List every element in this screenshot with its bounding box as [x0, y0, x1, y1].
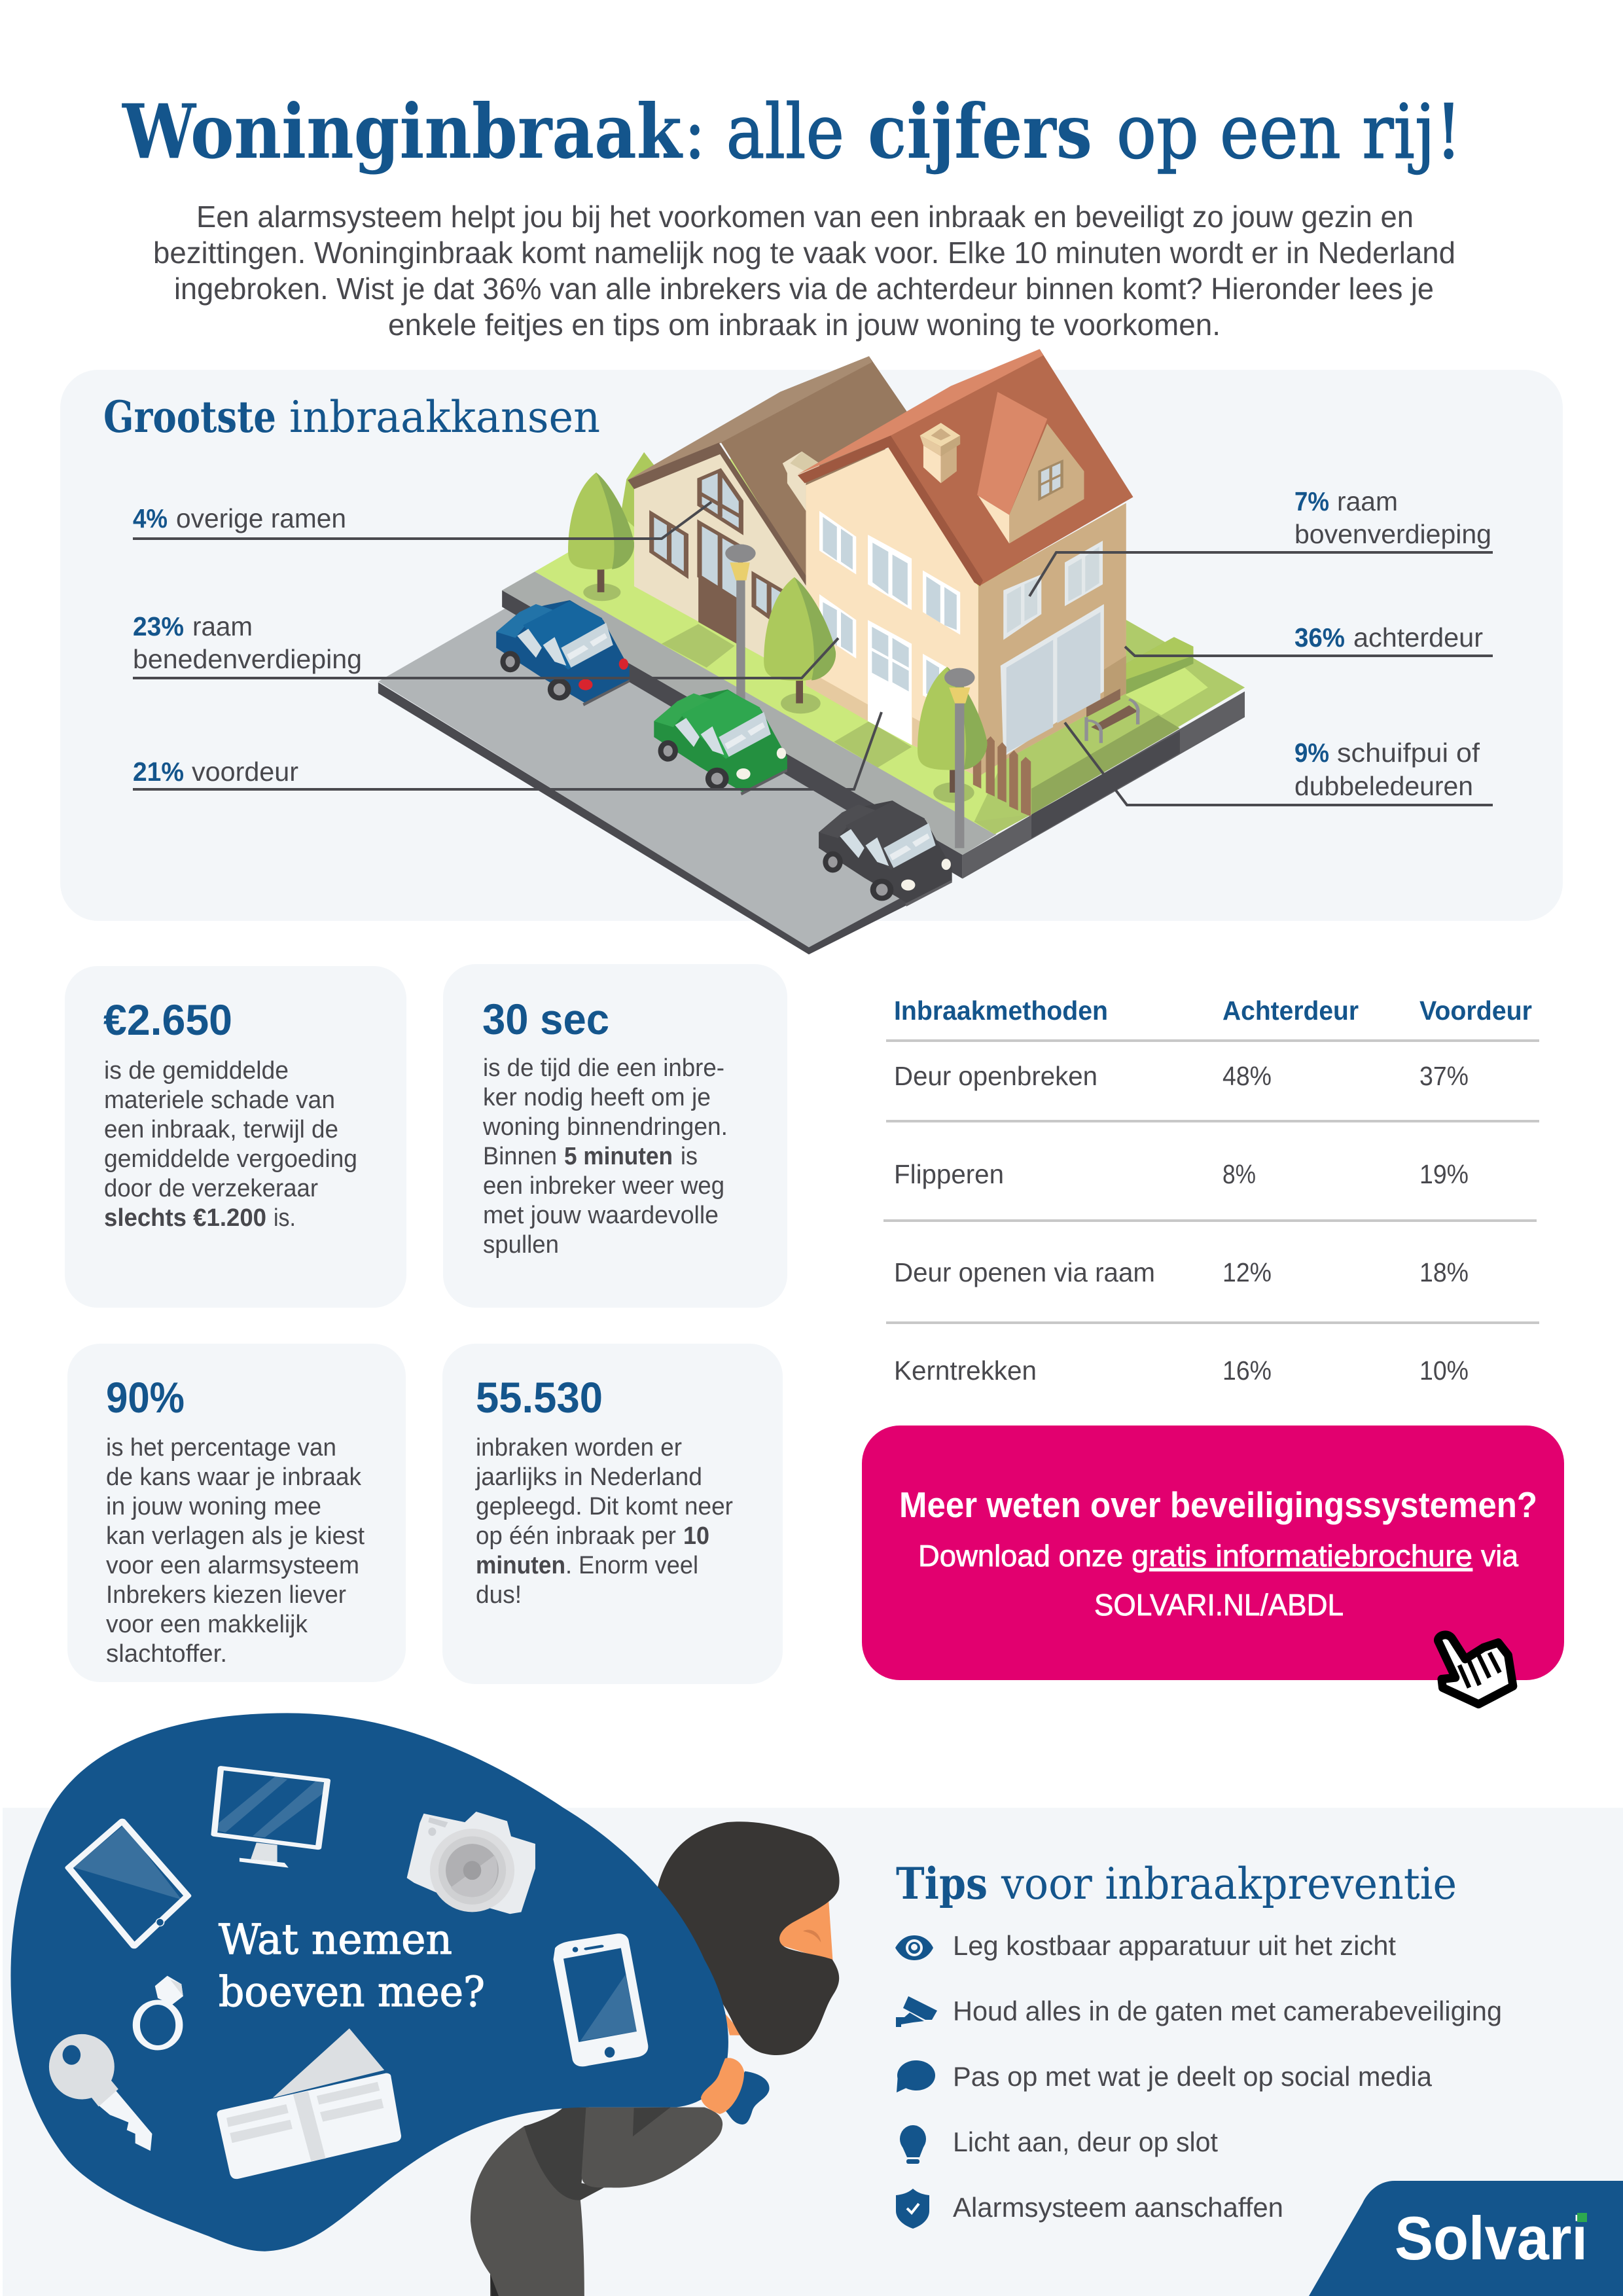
- table: inbraakmethoden: 37%: [1419, 1061, 1469, 1091]
- bench: [1086, 689, 1138, 743]
- callout: 36% achterdeur: [1125, 622, 1493, 656]
- table: inbraakmethoden: Deur openen via raam: [894, 1257, 1155, 1287]
- car: black: [819, 800, 952, 906]
- tip: camera: Houd alles in de gaten met camerabeveiliging: [953, 1996, 1502, 2026]
- tip: licht: [900, 2125, 1218, 2164]
- stat card: schade: is.: [274, 1204, 296, 1232]
- table: inbraakmethoden: 19%: [1419, 1159, 1469, 1189]
- stat card: percentage: Inbrekers kiezen liever: [106, 1581, 346, 1609]
- stat card: tijd: woning binnendringen.: [482, 1113, 728, 1141]
- stat card: schade: door de verzekeraar: [104, 1175, 318, 1202]
- stat card: tijd: met jouw waardevolle: [483, 1202, 719, 1229]
- callout: 9% schuifpui of dubbele deuren: dubbeledeuren: [1294, 771, 1473, 801]
- icon: smartphone: [554, 1933, 648, 2066]
- tip: apparatuur: Leg kostbaar apparatuur uit het zicht: [953, 1930, 1396, 1961]
- callout: download brochure: SOLVARI.NL/ABDL: [1094, 1588, 1344, 1622]
- heading: tips: Tips: [896, 1858, 988, 1909]
- heading: grootste inbraakkansen: Grootste: [103, 391, 276, 442]
- stat card: schade: gemiddelde vergoeding: [104, 1145, 357, 1173]
- logo: Solvari: Solvari: [1395, 2204, 1588, 2272]
- stat card: schade: is de gemiddelde: [104, 1057, 289, 1085]
- stat card: aantal inbraken: dus!: [476, 1581, 522, 1609]
- callout: 9% schuifpui of dubbele deuren: [1065, 723, 1493, 805]
- intro text: [153, 200, 1455, 342]
- illustration: isometric houses on street: [378, 349, 1245, 954]
- stat card: percentage: is het percentage van: [106, 1434, 336, 1462]
- stat card: tijd: spullen: [483, 1231, 559, 1259]
- table: inbraakmethoden: Inbraakmethoden: [894, 996, 1108, 1026]
- callout: 23% raam benedenverdieping: 23%: [133, 611, 184, 641]
- stat card: aantal inbraken: inbraken worden er: [476, 1434, 682, 1462]
- tree: front: [918, 667, 987, 803]
- heading: grootste inbraakkansen: inbraakkansen: [289, 392, 600, 442]
- stat card: aantal inbraken: jaarlijks in Nederland: [475, 1463, 702, 1491]
- stat card: percentage: [67, 1344, 406, 1682]
- stat card: schade: €2.650: [103, 996, 232, 1044]
- stat card: percentage: voor een makkelijk: [106, 1611, 308, 1638]
- callout: 7% raam bovenverdieping: [1029, 486, 1493, 596]
- stat card: aantal inbraken: [442, 1344, 783, 1684]
- callout: 23% raam benedenverdieping: benedenverdieping: [133, 644, 362, 674]
- callout: 21% voordeur: [133, 712, 882, 789]
- title: Woninginbraak: [122, 88, 683, 175]
- table: inbraakmethoden: [883, 996, 1539, 1386]
- callout: 9% schuifpui of dubbele deuren: 9%: [1294, 738, 1329, 768]
- tip: alarmsysteem: [896, 2189, 1283, 2229]
- intro text: bezittingen. Woninginbraak komt namelijk nog te vaak voor. Elke 10 minuten wordt er in Nederland: [153, 236, 1455, 270]
- stat card: tijd: is: [681, 1143, 698, 1170]
- intro text: enkele feitjes en tips om inbraak in jouw woning te voorkomen.: [388, 308, 1221, 342]
- bag heading: Wat nemen: [219, 1916, 452, 1964]
- heading: tips: voor inbraakpreventie: [1001, 1859, 1457, 1909]
- callout: 7% raam bovenverdieping: 7%: [1294, 486, 1329, 516]
- callout: 4% overige ramen: [133, 502, 711, 539]
- hand over bag: [701, 2058, 744, 2114]
- house: right orange-roof house: [783, 349, 1133, 777]
- stat card: aantal inbraken: 10: [683, 1522, 709, 1550]
- icon: diamond ring: [136, 1976, 183, 2048]
- icon: monitor: [214, 1768, 327, 1868]
- stat card: tijd: een inbreker weer weg: [483, 1172, 724, 1200]
- callout: 36% achterdeur: achterdeur: [1353, 622, 1483, 653]
- title: op een rij!: [1116, 88, 1462, 175]
- car: blue: [496, 600, 630, 706]
- stat card: tijd: Binnen: [483, 1143, 557, 1170]
- fence: [973, 736, 1031, 816]
- title: [122, 88, 1462, 175]
- intro text: Een alarmsysteem helpt jou bij het voorkomen van een inbraak en beveiligt zo jouw gezin en: [196, 200, 1414, 234]
- tip: licht: Licht aan, deur op slot: [953, 2126, 1218, 2157]
- callout: 4% overige ramen: overige ramen: [176, 503, 346, 533]
- tree: center: [764, 577, 836, 713]
- stat card: schade: een inbraak, terwijl de: [104, 1116, 338, 1143]
- stat card: percentage: de kans waar je inbraak: [106, 1463, 362, 1491]
- hedge: [1126, 637, 1193, 694]
- icon: tablet: [69, 1821, 188, 1946]
- illustration: blue loot bag: [10, 1713, 728, 2251]
- callout: 7% raam bovenverdieping: bovenverdieping: [1294, 519, 1491, 549]
- heading: grootste inbraakkansen: [103, 391, 600, 442]
- callout: 9% schuifpui of dubbele deuren: schuifpui of: [1337, 738, 1480, 768]
- panel: tips background: [3, 1808, 1623, 2296]
- table: inbraakmethoden: 16%: [1222, 1355, 1272, 1386]
- street lamp: right: [944, 668, 975, 848]
- icon: key: [49, 2034, 152, 2151]
- table: inbraakmethoden: Achterdeur: [1222, 996, 1359, 1026]
- callout: download brochure: [862, 1426, 1564, 1680]
- stat card: aantal inbraken: op één inbraak per: [476, 1522, 676, 1550]
- icon: camera: [407, 1812, 535, 1914]
- callout: 4% overige ramen: 4%: [133, 503, 168, 533]
- tree: back left: [620, 452, 656, 527]
- stat card: percentage: voor een alarmsysteem: [106, 1552, 359, 1579]
- tree: left of beige house: [568, 473, 634, 601]
- icon: pointing hand: [1438, 1635, 1513, 1704]
- table: inbraakmethoden: Flipperen: [894, 1159, 1004, 1189]
- callout: 7% raam bovenverdieping: raam: [1337, 486, 1398, 516]
- callout: download brochure: Meer weten over beveiligingssystemen?: [899, 1484, 1537, 1525]
- title: cijfers: [868, 88, 1092, 175]
- table: inbraakmethoden: Deur openbreken: [894, 1061, 1097, 1091]
- table: inbraakmethoden: 10%: [1419, 1355, 1469, 1386]
- bag heading: [219, 1916, 485, 2017]
- stat card: aantal inbraken: gepleegd. Dit komt neer: [476, 1493, 733, 1520]
- callout: 36% achterdeur: 36%: [1294, 622, 1345, 653]
- callout: download brochure: gratis informatiebrochure: [1132, 1539, 1472, 1573]
- stat card: percentage: 90%: [106, 1373, 185, 1422]
- intro text: ingebroken. Wist je dat 36% van alle inbrekers via de achterdeur binnen komt? Hieronder lees je: [174, 272, 1434, 306]
- table: inbraakmethoden: 8%: [1222, 1159, 1256, 1189]
- table: inbraakmethoden: Kerntrekken: [894, 1355, 1037, 1386]
- stat card: aantal inbraken: minuten: [476, 1552, 565, 1579]
- table: inbraakmethoden: Voordeur: [1419, 996, 1532, 1026]
- car: green: [654, 689, 787, 795]
- callout: 21% voordeur: 21%: [133, 757, 184, 787]
- table: inbraakmethoden: 18%: [1419, 1257, 1469, 1287]
- bag heading: boeven mee?: [219, 1968, 485, 2017]
- house: left beige house: [628, 356, 907, 681]
- tip: alarmsysteem: Alarmsysteem aanschaffen: [953, 2192, 1283, 2223]
- stat card: schade: materiele schade van: [104, 1086, 335, 1114]
- logo: Solvari: [1309, 2181, 1623, 2296]
- icon: wallet with banknote: [217, 2028, 401, 2179]
- stat card: tijd: 5 minuten: [564, 1143, 673, 1170]
- stat card: tijd: is de tijd die een inbre-: [483, 1054, 724, 1082]
- stat card: percentage: kan verlagen als je kiest: [106, 1522, 365, 1550]
- stat card: tijd: [443, 964, 787, 1308]
- callout: 23% raam benedenverdieping: raam: [192, 611, 253, 641]
- stat card: percentage: slachtoffer.: [106, 1640, 227, 1668]
- street lamp: left: [725, 545, 756, 702]
- callout: download brochure: via: [1481, 1539, 1518, 1573]
- stat card: tijd: ker nodig heeft om je: [483, 1084, 711, 1111]
- panel: grootste inbraakkansen: [60, 370, 1563, 921]
- stat card: aantal inbraken: 55.530: [476, 1373, 603, 1422]
- table: inbraakmethoden: 48%: [1222, 1061, 1272, 1091]
- tip: social media: Pas op met wat je deelt op social media: [953, 2061, 1433, 2092]
- stat card: percentage: in jouw woning mee: [106, 1493, 321, 1520]
- callout: download brochure: Download onze: [918, 1539, 1123, 1573]
- illustration: burglar figure: [471, 1821, 840, 2296]
- stat card: schade: slechts €1.200: [104, 1204, 266, 1232]
- callout: 21% voordeur: voordeur: [192, 757, 298, 787]
- title: : alle: [684, 88, 844, 175]
- stat card: tijd: 30 sec: [482, 995, 609, 1043]
- stat card: schade: [65, 966, 406, 1308]
- callout: 23% raam benedenverdieping: [133, 611, 838, 678]
- stat card: aantal inbraken: . Enorm veel: [565, 1552, 698, 1579]
- table: inbraakmethoden: 12%: [1222, 1257, 1272, 1287]
